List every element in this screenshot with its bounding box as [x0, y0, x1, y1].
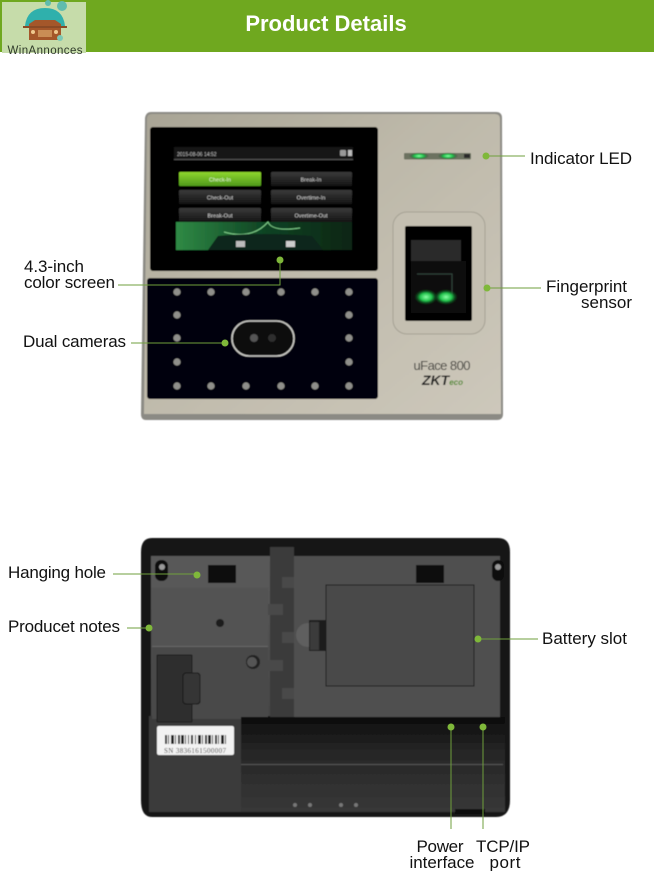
callout: indicator LED: Indicator LED: [530, 149, 632, 168]
battery cover: [294, 556, 500, 717]
callout: power interface: [410, 724, 474, 871]
button: Overtime-Out: [271, 208, 352, 222]
callout: hanging hole: [8, 563, 200, 582]
button: Overtime-Out: Overtime-Out: [294, 214, 328, 220]
callout: color screen: color screen: [24, 273, 115, 292]
callout: battery slot: Battery slot: [542, 629, 627, 648]
brand: ZKTeco: ZKTeco: [421, 372, 463, 388]
callout: color screen: 4.3-inch: [24, 257, 84, 276]
button: Break-Out: Break-Out: [207, 214, 233, 220]
touch screen: [150, 127, 378, 271]
callout: TCP/IP port: [476, 724, 530, 871]
button: Check-In: [179, 172, 261, 186]
callout: hanging hole: Hanging hole: [8, 563, 106, 582]
button: Break-In: Break-In: [301, 178, 321, 184]
button: Break-In: [271, 172, 352, 186]
title: Product Details: [245, 11, 407, 36]
indicator LED bar: [404, 152, 471, 160]
callout: battery slot: [474, 629, 627, 648]
hanging holes: [155, 560, 504, 583]
button: Break-Out: [179, 208, 261, 222]
callout: fingerprint sensor: Fingerprint: [546, 277, 627, 296]
callout: fingerprint sensor: sensor: [581, 293, 632, 312]
rear device photo: [141, 538, 510, 817]
notes plate: [152, 588, 268, 722]
button: Check-Out: Check-Out: [207, 196, 234, 202]
callout: indicator LED: [482, 149, 632, 168]
fingerprint sensor: [393, 212, 485, 334]
serial number sticker: [157, 726, 234, 755]
camera panel: [147, 278, 378, 399]
callout: dual cameras: [23, 332, 228, 351]
button: Check-In: Check-In: [209, 178, 231, 184]
button: Overtime-In: [271, 190, 352, 204]
lower compartment: [241, 717, 505, 814]
button: Check-Out: [179, 190, 261, 204]
button: Overtime-In: Overtime-In: [297, 196, 325, 202]
serial number sticker: SN 3836161500007: [164, 747, 226, 755]
header banner: [0, 0, 654, 52]
callout: dual cameras: Dual cameras: [23, 332, 126, 351]
model name: uFace 800: [414, 358, 470, 373]
callout: fingerprint sensor: [484, 277, 632, 312]
callout: TCP/IP port: TCP/IP: [476, 837, 530, 856]
logo: WinAnnonces: WinAnnonces: [8, 45, 83, 57]
callout: color screen: [24, 256, 284, 292]
center rib with tabs: [268, 547, 294, 717]
callout: product notes: Producet notes: [8, 617, 120, 636]
front device photo: [141, 112, 503, 420]
callout: power interface: Power: [416, 837, 464, 856]
touch screen: 2015-08-06 14:52: [177, 152, 217, 158]
logo: WinAnnonces: [2, 0, 86, 57]
